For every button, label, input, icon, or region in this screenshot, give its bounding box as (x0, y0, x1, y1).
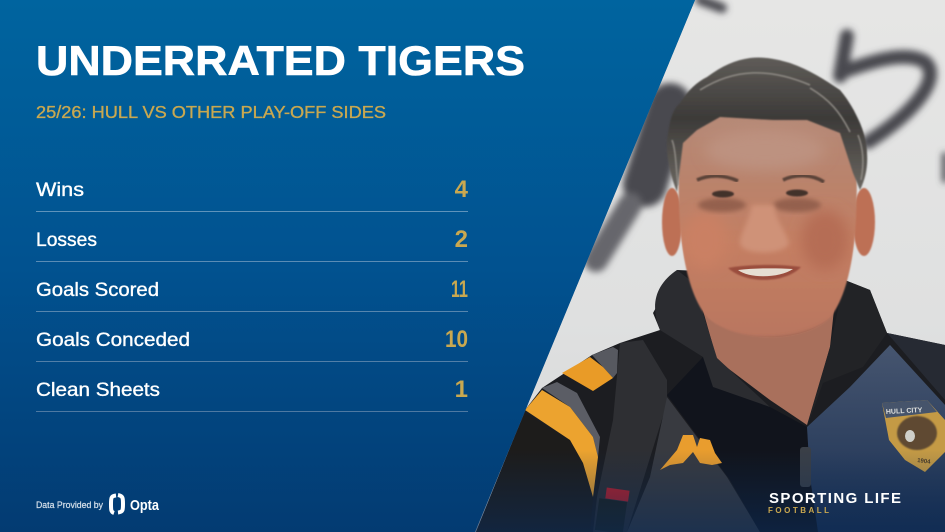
grey shoulder top (592, 347, 618, 378)
row: clean sheets: Clean Sheets (36, 380, 160, 401)
blurred graffiti on wall (596, 0, 945, 260)
ears (662, 188, 682, 256)
backpack strap (593, 340, 667, 532)
dark jacket centre (668, 358, 811, 490)
club badge (882, 400, 945, 472)
row: clean sheets (36, 376, 468, 412)
right strap (887, 333, 945, 400)
neck (703, 310, 834, 425)
eyes (712, 190, 734, 198)
brand logo (768, 490, 901, 515)
zip (800, 447, 811, 487)
blue panel (0, 0, 695, 532)
orange shoulder stripe lower (525, 390, 598, 497)
right collar (820, 280, 887, 379)
subtitle: 25/26: HULL VS OTHER PLAY-OFF SIDES (36, 102, 386, 122)
facial shading (683, 130, 849, 350)
grey hair streaks (672, 73, 863, 185)
row: wins: Wins (36, 180, 84, 201)
black sleeve (476, 509, 486, 532)
strap end (595, 498, 627, 532)
manager: jacket (470, 270, 945, 532)
stats table (36, 176, 469, 412)
row: clean sheets: 1 (455, 376, 468, 403)
row: goals scored (36, 276, 468, 312)
background photo panel (470, 0, 945, 532)
left collar (655, 270, 770, 407)
row: goals scored: Goals Scored (36, 280, 159, 301)
icon: Opta logo (111, 495, 123, 513)
grey jacket lower panel (627, 397, 760, 532)
hair (667, 57, 867, 192)
row: goals scored: 11 (451, 276, 468, 303)
title: UNDERRATED TIGERS (36, 37, 525, 84)
row: losses: 2 (455, 226, 468, 253)
red strap tag (605, 488, 630, 502)
row: losses: Losses (36, 230, 97, 251)
manager: head (662, 57, 875, 350)
brand logo: SPORTING LIFE (769, 490, 901, 507)
face (679, 110, 857, 337)
teeth (738, 268, 793, 276)
brand logo: FOOTBALL (768, 506, 829, 515)
row: wins (36, 176, 469, 212)
navy chest (807, 345, 945, 532)
nose (740, 205, 789, 253)
orange shoulder stripe upper (562, 357, 613, 391)
grey shoulder stripe (542, 382, 600, 457)
club badge: HULL CITY (886, 407, 923, 416)
row: goals conceded: 10 (445, 326, 468, 353)
Opta wordmark: Opta (130, 497, 160, 514)
bottom dark fade (470, 450, 945, 532)
row: wins: 4 (455, 176, 469, 203)
row: goals conceded: Goals Conceded (36, 330, 190, 351)
row: losses (36, 226, 468, 262)
jacket base (476, 270, 945, 532)
club badge: 1904 (917, 458, 931, 466)
mouth (728, 265, 801, 280)
eyebrows (697, 176, 738, 181)
Kappa logo (660, 435, 722, 470)
data credit: Data Provided by (36, 500, 103, 510)
row: goals conceded (36, 326, 468, 362)
